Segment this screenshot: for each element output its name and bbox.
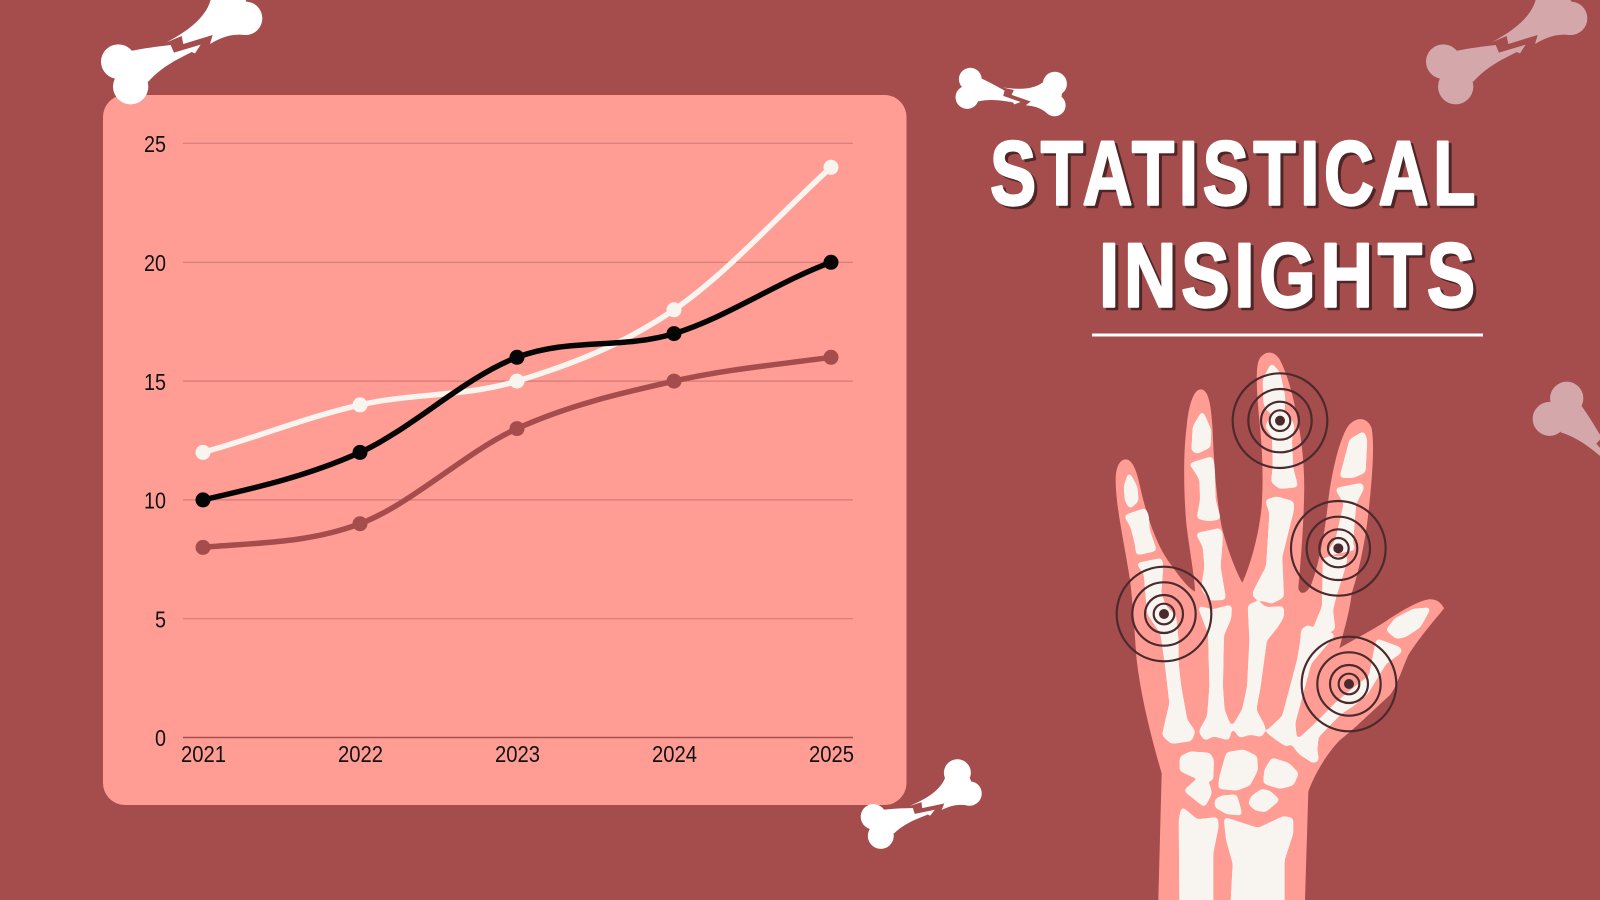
- target: pain marker little finger: [1117, 567, 1211, 661]
- x axis labels: 2023: [495, 741, 540, 767]
- panel: chart card: [103, 95, 906, 805]
- y axis labels: 0: [155, 725, 166, 751]
- y axis labels: 15: [144, 369, 166, 395]
- title: INSIGHTS: [1099, 226, 1480, 326]
- x axis labels: 2025: [809, 741, 854, 767]
- x axis labels: 2022: [338, 741, 383, 767]
- icon: broken bone top left: [101, 0, 262, 104]
- line chart: [144, 131, 854, 767]
- icon: broken bone bottom of card: [858, 751, 985, 858]
- icon: small broken bone above title: [945, 26, 1081, 157]
- title: INSIGHTS: [1102, 228, 1483, 329]
- x axis labels: [181, 741, 854, 767]
- hand bones: [1125, 365, 1429, 900]
- illustration: x-ray hand: [1116, 353, 1444, 900]
- series: dark red line: [196, 350, 838, 555]
- y axis labels: [144, 131, 166, 751]
- title: [990, 124, 1483, 329]
- hand silhouette: [1116, 353, 1444, 900]
- icon: broken bone top right faded: [1426, 0, 1587, 104]
- x axis labels: 2024: [652, 741, 697, 767]
- target: pain marker thumb: [1302, 637, 1396, 731]
- icon: broken bone right edge faded: [1523, 376, 1600, 487]
- y axis labels: 20: [144, 250, 166, 276]
- y axis labels: 10: [144, 488, 166, 514]
- x axis labels: 2021: [181, 741, 226, 767]
- y axis labels: 25: [144, 131, 166, 157]
- title underline: [1092, 334, 1483, 336]
- series: black line: [196, 255, 838, 507]
- target: pain marker middle finger: [1233, 373, 1327, 468]
- y axis labels: 5: [155, 606, 166, 632]
- target: pain marker index finger: [1291, 501, 1386, 596]
- series: white line: [196, 160, 838, 460]
